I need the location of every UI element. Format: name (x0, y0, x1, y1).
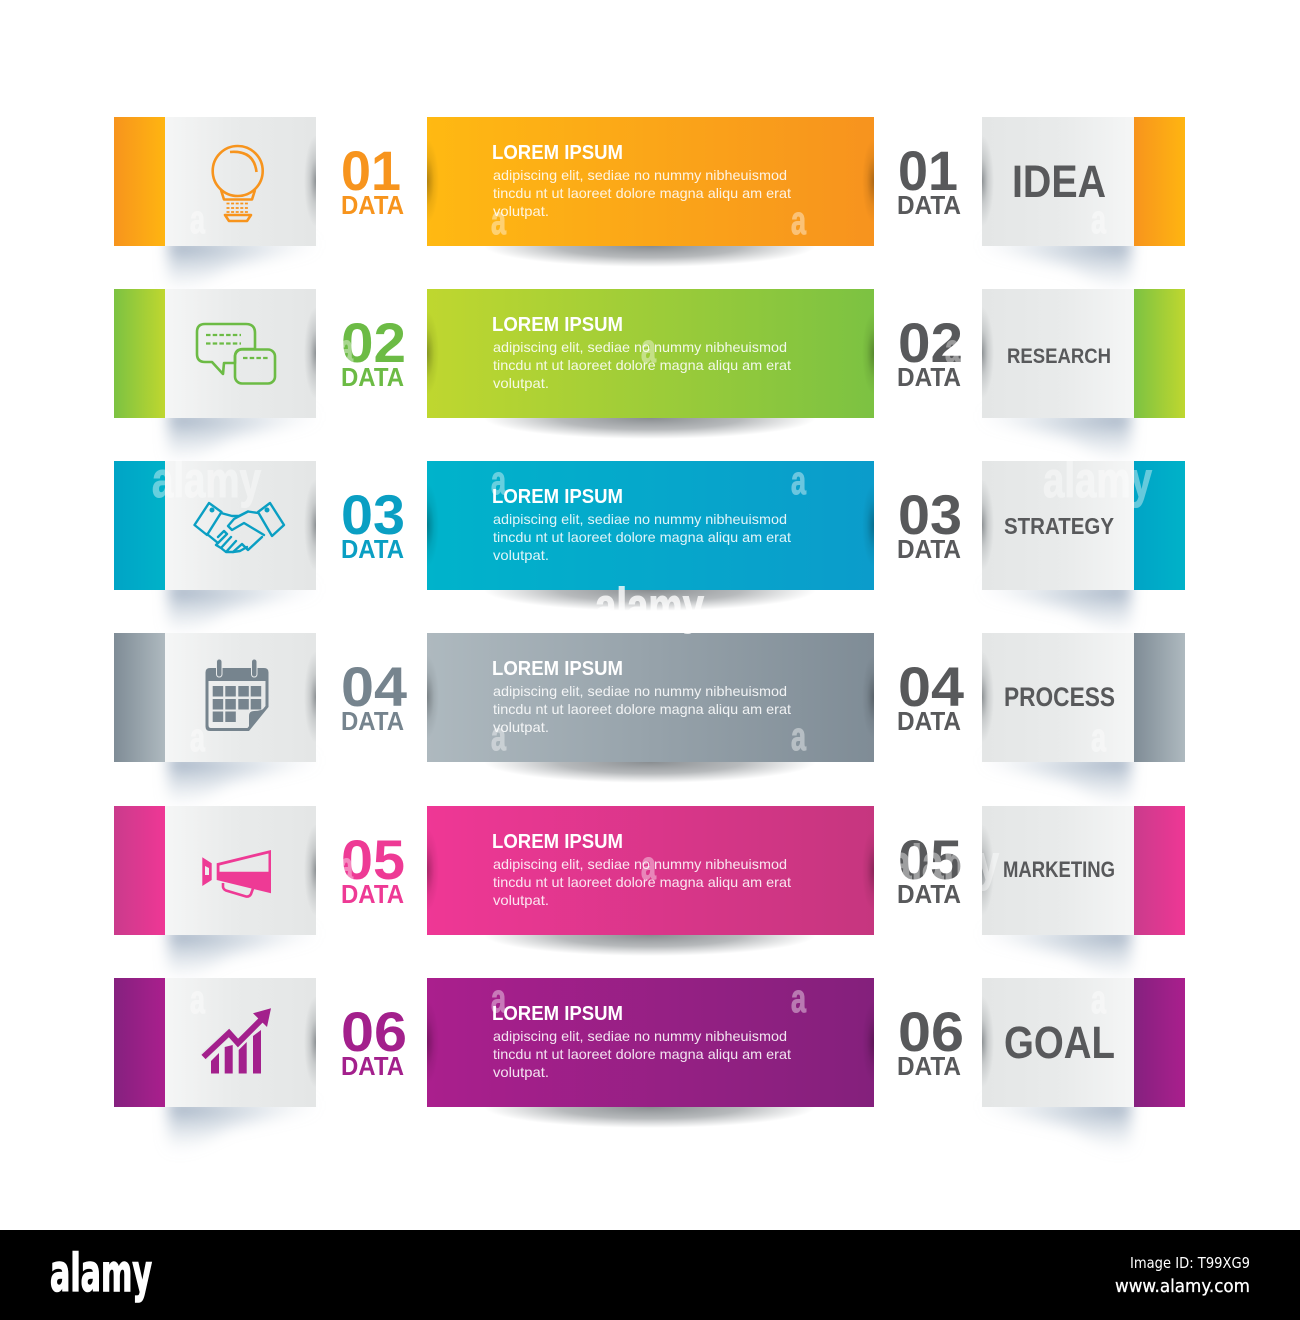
text block: volutpat. (493, 375, 549, 391)
right card fold shading (982, 314, 992, 392)
text block: tincdu nt ut laoreet dolore magna aliqu am erat (493, 874, 791, 890)
row 3: strategy (114, 452, 1185, 635)
centre bar edge shading (427, 493, 874, 557)
step number right: DATA (897, 534, 961, 564)
text block: volutpat. (493, 547, 549, 563)
text block: volutpat. (493, 719, 549, 735)
text block (492, 486, 791, 563)
text block (492, 831, 791, 908)
step number left: 03 (341, 483, 405, 546)
step number right: 05 (898, 828, 962, 891)
text block: LOREM IPSUM (492, 486, 623, 508)
text block: adipiscing elit, sediae no nummy nibheuismod (493, 683, 787, 699)
text block: tincdu nt ut laoreet dolore magna aliqu am erat (493, 185, 791, 201)
text block (492, 142, 791, 219)
text block: tincdu nt ut laoreet dolore magna aliqu am erat (493, 529, 791, 545)
step number right: 06 (898, 1000, 964, 1063)
right card shadow (985, 928, 1131, 980)
right card shadow (985, 583, 1131, 635)
left card shadow (168, 928, 314, 980)
watermark letters centre: a (791, 459, 807, 503)
watermark letters cards: a (190, 978, 206, 1022)
text block (492, 314, 791, 391)
right card shadow (985, 411, 1131, 463)
right paper card (982, 289, 1134, 418)
icon: handshake (194, 503, 284, 552)
step number left: DATA (341, 879, 404, 909)
centre colour bar (427, 117, 874, 246)
step number right: DATA (897, 362, 961, 392)
watermark letters centre: a (491, 977, 507, 1021)
right card fold shading (982, 658, 992, 736)
watermark letter on left number: a (340, 327, 353, 371)
step number left: 04 (341, 655, 407, 718)
right card shadow (985, 755, 1131, 807)
centre colour bar (427, 289, 874, 418)
centre bar shadow (484, 569, 816, 611)
watermark letters: a (791, 715, 807, 759)
left card shadow (168, 239, 314, 291)
left colour tab (114, 978, 165, 1107)
step number left: DATA (341, 706, 404, 736)
watermark letters (190, 198, 1107, 243)
footer image id: Image ID: T99XG9 (1130, 1254, 1250, 1272)
left card shadow (168, 1100, 314, 1152)
watermark alamy over right number: alamy (890, 835, 999, 891)
watermark letter on right number: a (945, 327, 961, 371)
text block: tincdu nt ut laoreet dolore magna aliqu am erat (493, 701, 791, 717)
watermark alamy right: alamy (1043, 452, 1152, 508)
centre bar shadow (484, 741, 816, 783)
step number right: DATA (897, 1051, 961, 1081)
left card fold shading (306, 658, 316, 736)
right card label: IDEA (1012, 156, 1106, 207)
right colour tab (1134, 633, 1185, 762)
text block: tincdu nt ut laoreet dolore magna aliqu am erat (493, 1046, 791, 1062)
watermark letters: a (791, 199, 807, 243)
row 6: goal (114, 977, 1185, 1152)
text block (492, 1003, 791, 1080)
step number right: 04 (898, 655, 964, 718)
text block: LOREM IPSUM (492, 142, 623, 164)
right paper card (982, 806, 1134, 935)
step number right: DATA (897, 190, 961, 220)
right card shadow (985, 1100, 1131, 1152)
watermark alamy left: alamy (152, 452, 261, 508)
left paper card (165, 806, 316, 935)
left colour tab (114, 633, 165, 762)
left card shadow (168, 755, 314, 807)
centre colour bar (427, 978, 874, 1107)
text block: tincdu nt ut laoreet dolore magna aliqu am erat (493, 357, 791, 373)
right card shadow (985, 239, 1131, 291)
step number right: DATA (897, 706, 961, 736)
text block: adipiscing elit, sediae no nummy nibheuismod (493, 856, 787, 872)
text block: adipiscing elit, sediae no nummy nibheuismod (493, 1028, 787, 1044)
left paper card (165, 117, 316, 246)
right card fold shading (982, 486, 992, 564)
right colour tab (1134, 461, 1185, 590)
step number right: DATA (897, 879, 961, 909)
watermark letters: a (190, 716, 206, 760)
centre colour bar (427, 806, 874, 935)
icon: chat bubbles (197, 324, 275, 384)
step number left: 02 (341, 311, 406, 374)
left colour tab (114, 289, 165, 418)
centre colour bar (427, 461, 874, 590)
text block: volutpat. (493, 892, 549, 908)
text block: LOREM IPSUM (492, 314, 623, 336)
centre bar shadow (484, 1086, 816, 1128)
centre bar shadow (484, 225, 816, 267)
text block: LOREM IPSUM (492, 1003, 623, 1025)
text block: volutpat. (493, 1064, 549, 1080)
watermark letter: a (641, 844, 657, 888)
centre colour bar (427, 633, 874, 762)
right card fold shading (982, 1003, 992, 1080)
watermark letters: a (491, 199, 507, 243)
centre bar shadow (484, 914, 816, 956)
icon: rising chart (204, 1008, 271, 1074)
right paper card (982, 633, 1134, 762)
footer logo: alamy (50, 1244, 152, 1304)
left card fold shading (306, 1004, 316, 1080)
left paper card (165, 461, 316, 590)
right card label: STRATEGY (1004, 513, 1114, 539)
left paper card (165, 633, 316, 762)
step number right: 02 (898, 311, 963, 374)
right card fold shading (982, 831, 992, 908)
text block (492, 658, 791, 735)
right card label: PROCESS (1004, 682, 1115, 712)
watermark letters: a (1091, 198, 1107, 242)
right card fold shading (982, 142, 992, 220)
right card label: MARKETING (1003, 857, 1115, 882)
left card fold shading (306, 831, 316, 908)
step number right: 01 (898, 139, 958, 202)
right colour tab (1134, 289, 1185, 418)
right paper card (982, 461, 1134, 590)
right colour tab (1134, 117, 1185, 246)
step number left: DATA (341, 190, 404, 220)
centre bar edge shading (427, 1012, 874, 1072)
left paper card (165, 289, 316, 418)
watermark letters centre (491, 459, 807, 503)
right colour tab (1134, 978, 1185, 1107)
footer url: www.alamy.com (1115, 1276, 1250, 1297)
right colour tab (1134, 806, 1185, 935)
text block: adipiscing elit, sediae no nummy nibheuismod (493, 339, 787, 355)
text block: volutpat. (493, 203, 549, 219)
right card label: RESEARCH (1007, 345, 1111, 368)
step number left: 05 (341, 828, 405, 891)
watermark letters: a (491, 715, 507, 759)
left card shadow (168, 583, 314, 635)
step number left: 01 (341, 139, 401, 202)
watermark letter: a (641, 327, 657, 371)
right paper card (982, 117, 1134, 246)
left card fold shading (306, 314, 316, 392)
right card label: GOAL (1004, 1017, 1115, 1068)
text block: adipiscing elit, sediae no nummy nibheuismod (493, 511, 787, 527)
watermark letters (190, 715, 1107, 760)
step number left: 06 (341, 1000, 407, 1063)
text block: adipiscing elit, sediae no nummy nibheuismod (493, 167, 787, 183)
watermark letters cards (190, 978, 1107, 1022)
footer bar (0, 1230, 1300, 1320)
left colour tab (114, 806, 165, 935)
watermark letters centre: a (491, 459, 507, 503)
icon: light bulb (213, 146, 263, 221)
centre bar shadow (484, 397, 816, 439)
centre bar edge shading (427, 320, 874, 386)
watermark alamy centre: alamy (595, 578, 704, 634)
watermark letters cards: a (1091, 978, 1107, 1022)
watermark letters: a (1091, 716, 1107, 760)
watermark letters centre (491, 977, 807, 1021)
step number left: DATA (341, 534, 404, 564)
icon: megaphone (202, 850, 271, 897)
centre bar edge shading (427, 147, 874, 215)
watermark letters centre: a (791, 977, 807, 1021)
step number right: 03 (898, 483, 962, 546)
left card fold shading (306, 142, 316, 220)
right paper card (982, 978, 1134, 1107)
text block: LOREM IPSUM (492, 831, 623, 853)
row 5: marketing (114, 806, 1185, 980)
left card shadow (168, 411, 314, 463)
left colour tab (114, 461, 165, 590)
centre bar edge shading (427, 836, 874, 904)
left colour tab (114, 117, 165, 246)
centre bar edge shading (427, 666, 874, 728)
left card fold shading (306, 486, 316, 564)
row 1: idea (114, 117, 1185, 291)
watermark letters: a (190, 198, 206, 242)
step number left: DATA (341, 362, 404, 392)
row 2: research (114, 289, 1185, 463)
step number left: DATA (341, 1051, 404, 1081)
watermark letter on left number: a (340, 845, 353, 889)
text block: LOREM IPSUM (492, 658, 623, 680)
left paper card (165, 978, 316, 1107)
row 4: process (114, 578, 1185, 807)
icon: calendar (206, 659, 268, 731)
